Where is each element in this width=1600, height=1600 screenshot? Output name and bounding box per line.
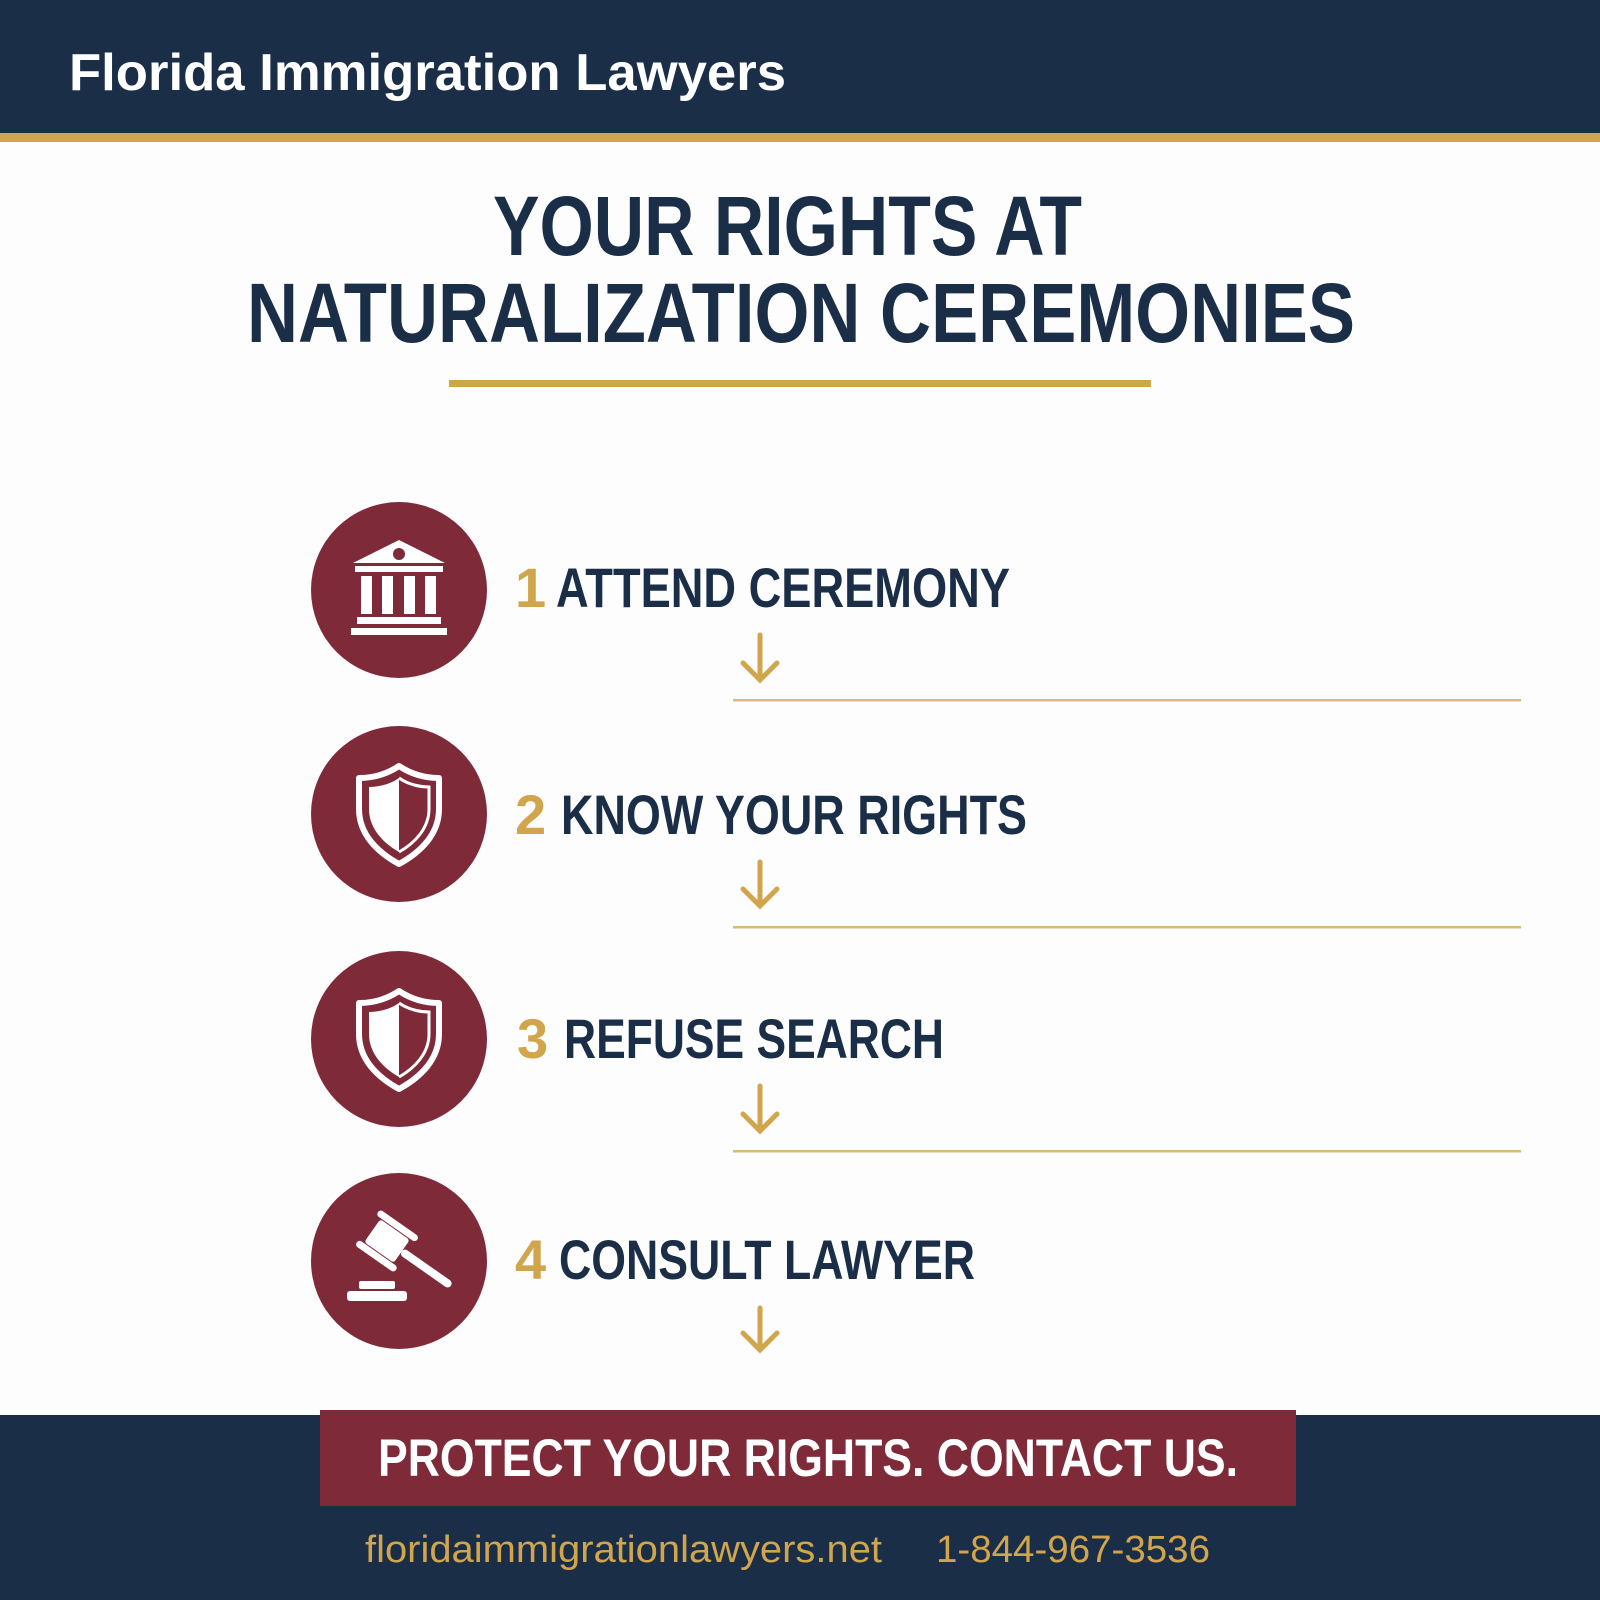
step 2 label: 2: [515, 783, 546, 846]
arrow 4: [743, 1308, 777, 1350]
footer: [0, 1410, 1600, 1600]
arrow 2: [743, 862, 777, 906]
title: YOUR RIGHTS AT: [493, 179, 1082, 273]
contact info: floridaimmigrationlawyers.net: [365, 1529, 882, 1571]
arrow 3: [743, 1086, 777, 1131]
CTA banner: [320, 1410, 1296, 1506]
CTA banner: PROTECT YOUR RIGHTS. CONTACT US.: [378, 1429, 1238, 1488]
step 2: KNOW YOUR RIGHTS: [561, 783, 1027, 846]
step 1 label: 1: [515, 556, 546, 619]
step 1: [311, 502, 1010, 678]
contact info: [365, 1529, 1210, 1571]
step 2: [311, 726, 1027, 902]
icon: shield: [311, 726, 487, 902]
header brand text: Florida Immigration Lawyers: [69, 44, 786, 102]
icon: shield: [311, 951, 487, 1127]
step 3: REFUSE SEARCH: [564, 1007, 944, 1070]
step 3: [311, 951, 944, 1127]
title underline: [449, 380, 1151, 387]
title: [247, 179, 1355, 360]
header bar: [0, 0, 1600, 142]
step 4 label: 4: [515, 1228, 546, 1291]
contact info: 1-844-967-3536: [936, 1529, 1210, 1571]
step 3 label: 3: [517, 1007, 548, 1070]
arrow 1: [743, 635, 777, 680]
title: NATURALIZATION CEREMONIES: [247, 266, 1355, 360]
step 1: ATTEND CEREMONY: [556, 556, 1010, 619]
step 4: [311, 1173, 975, 1349]
icon: gavel: [311, 1173, 487, 1349]
icon: building: [311, 502, 487, 678]
step 4: CONSULT LAWYER: [559, 1228, 975, 1291]
